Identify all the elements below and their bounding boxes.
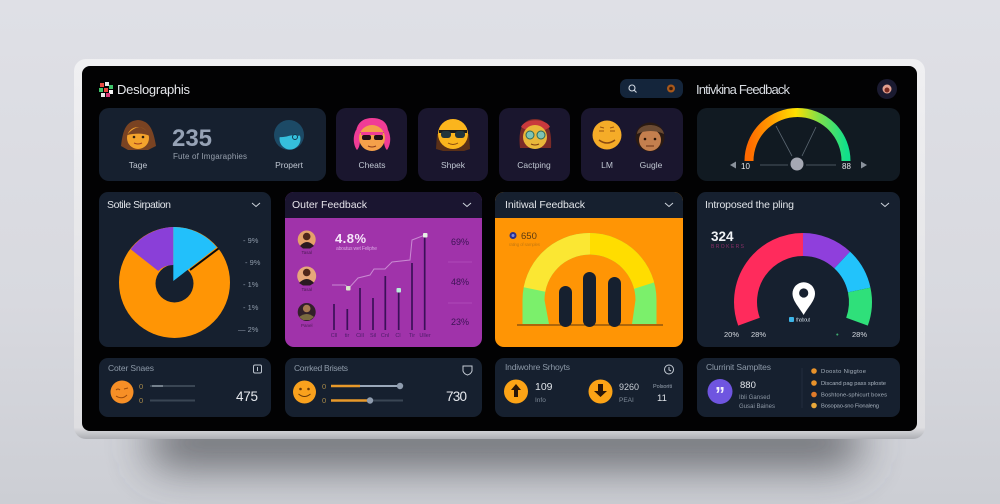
heading: Initiwal Feedback xyxy=(505,199,586,211)
icon: chevron xyxy=(881,203,889,206)
stat: 880: Ibli Gansed xyxy=(739,395,770,401)
pie legend: - 1% xyxy=(243,303,259,312)
stat: Polsoriti 11 xyxy=(653,384,672,404)
gauge arc xyxy=(749,112,846,161)
stat: 9260 xyxy=(619,382,639,404)
panel: Outer Feedback xyxy=(285,192,482,347)
label: Tage: Tage xyxy=(129,160,147,170)
bottom labels: • xyxy=(836,330,839,339)
pie legend: - 9% xyxy=(245,258,261,267)
panel: pie chart xyxy=(99,192,271,347)
stat: 880: 880 xyxy=(740,380,756,391)
right labels: 69% xyxy=(451,237,469,247)
stat: 324: BROKERS xyxy=(711,244,745,250)
device frame xyxy=(74,59,925,439)
panel: Shpek xyxy=(418,108,488,181)
gauge left label: 10 xyxy=(741,162,750,171)
label: Gugle: Gugle xyxy=(640,160,663,170)
icon: clock xyxy=(664,365,674,374)
stat: 109 xyxy=(535,381,553,404)
label: LM: LM xyxy=(601,160,613,170)
stat: 880 xyxy=(739,380,775,410)
stat: 235: 235 xyxy=(172,125,212,152)
pie xyxy=(119,227,230,338)
sliders xyxy=(322,382,403,405)
gauge left label xyxy=(730,162,750,171)
heading: Corrked Brisets xyxy=(294,363,348,373)
panel: top summary xyxy=(99,108,326,181)
bottom labels: 28% xyxy=(852,330,867,339)
panel: top gauge xyxy=(697,108,900,181)
stat: 109: Info xyxy=(535,397,546,404)
avatars: Panel xyxy=(301,323,312,328)
pie legend: - 1% xyxy=(243,280,259,289)
x axis labels: Uller xyxy=(419,333,431,339)
icon: info box xyxy=(254,365,262,373)
search bar xyxy=(620,79,683,98)
avatars: Tasal xyxy=(301,287,312,292)
pin legend xyxy=(789,317,811,324)
sliders: 0 xyxy=(139,396,143,405)
stat: 109: 109 xyxy=(535,381,553,393)
heading: Outer Feedback xyxy=(292,199,368,211)
stat: Polsoriti 11: Polsoriti xyxy=(653,384,672,390)
panel: Corrked Brisets xyxy=(285,358,482,417)
bullet list xyxy=(811,368,887,410)
pie legend: - 9% xyxy=(243,236,259,245)
device shadow xyxy=(150,420,860,466)
x axis labels: Cill xyxy=(356,333,364,339)
icon: chevron xyxy=(665,203,673,206)
stat: 4.8%: aboutus wet Feliphe xyxy=(336,246,377,252)
sliders: 0 xyxy=(322,396,326,405)
pie legend: — 2% xyxy=(238,325,259,334)
icon: blue face xyxy=(274,120,304,150)
bullet list: Bosopao-sno Fionaleng xyxy=(821,404,879,410)
bullet list: Discand pag pass sploste xyxy=(821,381,886,387)
icon: up arrow xyxy=(504,380,528,404)
x axis labels: Tir xyxy=(409,333,415,339)
heading: Clurrinit Sampltes xyxy=(706,362,771,372)
arch gauge xyxy=(520,230,660,326)
label: Propert: Propert xyxy=(275,160,304,170)
icon: yellow face with sunglasses xyxy=(436,119,470,151)
stat: 9260: PEAI xyxy=(619,397,634,404)
bottom labels: 28% xyxy=(751,330,766,339)
icon: winking face xyxy=(110,380,134,404)
heading: Coter Snaes xyxy=(108,363,154,373)
icon: brown hair face xyxy=(636,122,664,152)
icon: down arrow xyxy=(588,380,612,404)
sliders xyxy=(139,382,195,405)
panel: Cactping xyxy=(499,108,570,181)
right labels: 23% xyxy=(451,317,469,327)
label: Cheats: Cheats xyxy=(359,160,385,170)
icon: red hair face with glasses xyxy=(520,119,551,149)
icon: location pin xyxy=(792,282,815,315)
baseline xyxy=(517,324,663,326)
stat: 235 xyxy=(172,125,247,161)
stat: 650 xyxy=(509,231,541,247)
bars xyxy=(559,272,621,327)
value: 475: 475 xyxy=(236,389,258,404)
x axis labels: Sil xyxy=(370,333,376,339)
panel: Indiwohre Srhoyts xyxy=(495,358,683,417)
avatars xyxy=(297,230,316,328)
panel: Clurrinit Sampltes xyxy=(697,358,900,417)
line chart xyxy=(332,235,425,288)
heading: Indiwohre Srhoyts xyxy=(505,362,570,372)
stat: Polsoriti 11: 11 xyxy=(657,393,667,404)
gauge knob xyxy=(790,158,804,170)
icon: chevron xyxy=(463,203,471,206)
bullet list: Doosto Niggtoe xyxy=(821,369,866,375)
stat: 880: Gusai Baines xyxy=(739,404,775,410)
x axis labels: Cll xyxy=(331,333,337,339)
icon: brown hair face xyxy=(121,120,156,150)
icon: smiling face xyxy=(293,380,316,404)
panel: Cheats xyxy=(336,108,407,181)
segmented gauge xyxy=(746,244,860,322)
pie legend xyxy=(238,236,261,334)
sliders: 0 xyxy=(139,382,143,391)
icon: chevron xyxy=(252,203,260,206)
label: Shpek: Shpek xyxy=(441,160,466,170)
avatars: Tasal xyxy=(301,250,312,255)
bullet list: Boshtone-sphicurt boxes xyxy=(821,392,887,398)
stat: 324: 324 xyxy=(711,229,734,244)
gauge right label xyxy=(842,162,867,171)
header title: Intivkina Feedback: Intivkina Feedback xyxy=(696,82,790,97)
stat: 4.8%: 4.8% xyxy=(335,231,366,246)
x axis labels: tir xyxy=(345,333,349,339)
icon: pink hair face with sunglasses xyxy=(354,118,390,151)
icon: quote badge xyxy=(708,379,732,406)
right labels xyxy=(451,237,469,327)
pin legend: thabout xyxy=(796,318,811,324)
stat: 235: Fute of Imgaraphies xyxy=(173,152,247,161)
sliders: 0 xyxy=(322,382,326,391)
value: 730: 730 xyxy=(446,389,467,404)
right labels: 48% xyxy=(451,277,469,287)
x axis labels: Cl xyxy=(395,333,401,339)
stat: 324 xyxy=(711,229,745,250)
icon: yellow smiling face xyxy=(592,120,622,150)
chart markers xyxy=(346,233,428,292)
x axis labels xyxy=(331,333,431,339)
panel: Coter Snaes xyxy=(99,358,271,417)
icon: quote badge: ” xyxy=(715,384,725,406)
panel: Introduced the pling xyxy=(697,192,900,347)
label: Cactping: Cactping xyxy=(517,160,551,170)
gauge right label: 88 xyxy=(842,162,851,171)
panel: Initial Feedback xyxy=(495,192,683,347)
icon: shield xyxy=(463,366,472,375)
profile icon xyxy=(877,79,897,99)
bar chart xyxy=(334,235,425,330)
heading: Sotile Sirpation xyxy=(107,199,171,211)
logo: Deslographis xyxy=(117,82,190,97)
stat: 650: 650 xyxy=(521,231,537,242)
bottom labels: 20% xyxy=(724,330,739,339)
x axis labels: Cnl xyxy=(381,333,389,339)
stat: 650: rating of samples xyxy=(509,242,541,247)
stat: 9260: 9260 xyxy=(619,382,639,392)
gridlines xyxy=(448,262,472,303)
panel: LM and Gugle xyxy=(581,108,683,181)
gauge axis and needle xyxy=(760,126,836,165)
heading: Introposed the pling xyxy=(705,199,794,211)
stat: 4.8% xyxy=(335,231,377,252)
bottom labels xyxy=(724,330,867,339)
